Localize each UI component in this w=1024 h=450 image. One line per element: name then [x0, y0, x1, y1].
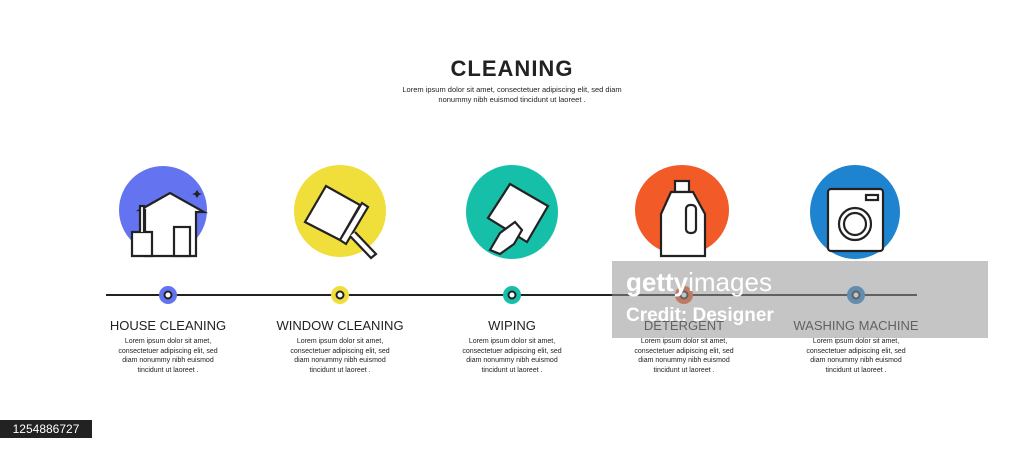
step labels: tincidunt ut laoreet .: [481, 366, 543, 374]
icon: house: [119, 166, 207, 256]
step labels: DETERGENT: [644, 318, 724, 333]
icon: detergent: [635, 165, 729, 256]
step labels: WASHING MACHINE: [793, 318, 919, 333]
step labels: WIPING: [488, 318, 536, 333]
subtitle: [402, 85, 622, 104]
step labels: tincidunt ut laoreet .: [653, 366, 715, 374]
icon: washing machine: [810, 165, 900, 259]
stock id: [0, 420, 92, 438]
step labels: Lorem ipsum dolor sit amet,: [641, 338, 727, 345]
icon: wiping: [466, 165, 558, 259]
timeline dots: [159, 286, 865, 304]
step labels: consectetuer adipiscing elit, sed: [118, 348, 218, 354]
subtitle: nonummy nibh euismod tincidunt ut laoreet .: [438, 95, 586, 104]
step labels: consectetuer adipiscing elit, sed: [290, 348, 390, 354]
step labels: HOUSE CLEANING: [110, 318, 226, 333]
title: CLEANING: [451, 56, 573, 81]
step labels: Lorem ipsum dolor sit amet,: [125, 338, 211, 345]
stock id: 1254886727: [13, 422, 79, 436]
step labels: Lorem ipsum dolor sit amet,: [469, 338, 555, 345]
step labels: Lorem ipsum dolor sit amet,: [813, 338, 899, 345]
step labels: consectetuer adipiscing elit, sed: [462, 348, 562, 354]
step labels: tincidunt ut laoreet .: [309, 366, 371, 374]
step labels: tincidunt ut laoreet .: [137, 366, 199, 374]
step labels: diam nonummy nibh euismod: [122, 357, 214, 364]
step labels: diam nonummy nibh euismod: [638, 357, 730, 364]
step labels: diam nonummy nibh euismod: [466, 357, 558, 364]
step labels: diam nonummy nibh euismod: [810, 357, 902, 364]
watermark overlay: Credit: Designer: [626, 305, 774, 326]
step labels: consectetuer adipiscing elit, sed: [806, 348, 906, 354]
step labels: tincidunt ut laoreet .: [825, 366, 887, 374]
step labels: diam nonummy nibh euismod: [294, 357, 386, 364]
watermark overlay: [612, 261, 988, 338]
subtitle: Lorem ipsum dolor sit amet, consectetuer adipiscing elit, sed diam: [402, 85, 622, 94]
step labels: WINDOW CLEANING: [276, 318, 404, 333]
step labels: Lorem ipsum dolor sit amet,: [297, 338, 383, 345]
step labels: consectetuer adipiscing elit, sed: [634, 348, 734, 354]
watermark overlay: gettyimages: [626, 267, 772, 297]
icon: squeegee: [294, 165, 386, 258]
timeline line: [106, 294, 917, 296]
